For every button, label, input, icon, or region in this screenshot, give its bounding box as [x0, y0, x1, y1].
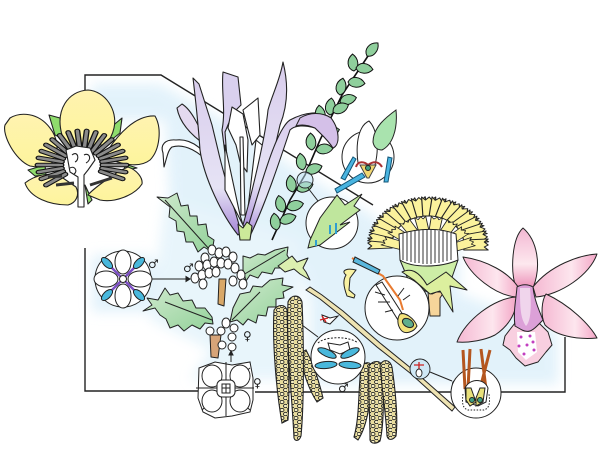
sex symbols: ♂	[148, 257, 159, 271]
buttercup flower	[5, 90, 159, 207]
fern branch with small leaves	[269, 40, 381, 240]
petals	[60, 90, 115, 145]
female flower cluster	[206, 318, 238, 351]
small circle: female catkin flower	[410, 359, 430, 379]
right catkins	[354, 361, 397, 443]
column	[514, 285, 543, 331]
female floral diagram	[196, 362, 254, 418]
lip spots	[518, 334, 536, 356]
catkin male flower icon	[320, 315, 338, 324]
stamens	[35, 129, 129, 188]
iris flower	[162, 62, 338, 240]
leaf: upper right	[243, 247, 291, 281]
dandelion flower	[368, 197, 489, 316]
sex symbols: ♀	[253, 376, 262, 390]
purple petal tip over fern	[296, 114, 338, 148]
catkin branch	[306, 287, 455, 411]
right fall petal	[246, 113, 338, 236]
leaf: upper left	[157, 193, 214, 252]
ray florets	[368, 197, 489, 251]
circle: female flower detail	[451, 349, 501, 418]
hook petal	[162, 140, 216, 168]
iris base	[238, 222, 252, 240]
female flower stalk	[210, 335, 221, 358]
sepals	[28, 115, 137, 204]
pistil centre and stalk	[66, 146, 95, 207]
leaf: lower right	[230, 278, 293, 325]
arrow: male diagram to cluster	[152, 276, 190, 282]
region outline	[85, 75, 565, 392]
small yellow-green leaf	[278, 256, 310, 280]
arrow: catkin to male circle	[302, 325, 318, 337]
circle: pistil detail with style and stamen	[344, 257, 429, 340]
left catkins	[274, 296, 323, 440]
connector line	[430, 372, 452, 381]
sex symbols	[148, 257, 460, 395]
orchid	[457, 228, 597, 366]
striped corolla tube	[399, 230, 458, 266]
circle: leaf spike detail	[335, 110, 396, 193]
right spike petal	[243, 62, 287, 233]
leaf: lower left	[143, 288, 213, 331]
male floral diagram	[94, 250, 152, 308]
small circle on branch	[297, 172, 313, 188]
male flower stalk	[218, 279, 226, 306]
connector line	[308, 188, 318, 201]
white inner petals	[228, 107, 248, 172]
lip	[503, 322, 552, 366]
flower stalk	[428, 292, 444, 316]
petals	[513, 228, 538, 288]
green bracts	[400, 260, 458, 294]
sex symbols: ♀	[243, 329, 252, 343]
far left petal	[177, 104, 207, 146]
blue background wash	[92, 84, 558, 384]
circle: leaf detail	[306, 194, 362, 249]
left fall petal	[193, 78, 241, 235]
arrow: female diagram to cluster	[229, 351, 233, 362]
male flower cluster	[191, 245, 247, 289]
centre lavender petal	[222, 72, 241, 185]
leaf midribs	[165, 200, 285, 320]
circle: male catkin detail	[311, 330, 365, 384]
sex symbols: ♂	[183, 261, 194, 275]
holly plant	[143, 193, 310, 358]
sex symbols: ♂	[338, 381, 349, 395]
sex symbols: ♀	[451, 378, 460, 392]
